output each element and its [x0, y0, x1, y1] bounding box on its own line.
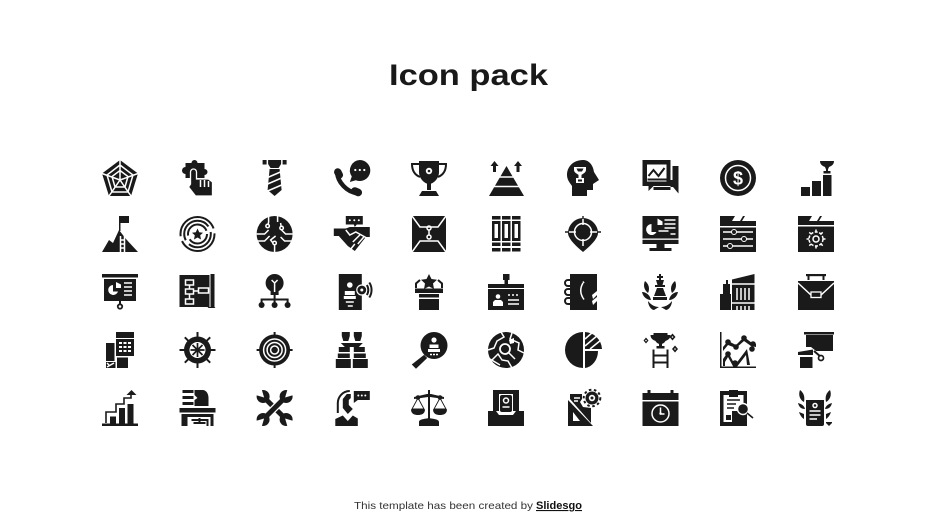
icon: target location pin	[565, 216, 601, 252]
icon: bars with trophy	[801, 161, 834, 196]
icon: office desk with chair	[180, 390, 216, 426]
icon: document with laurels	[798, 390, 832, 426]
icon: computer monitor dashboard	[642, 216, 678, 251]
icon: smartphone with signal	[339, 274, 372, 310]
icon: mountain with flag	[102, 216, 138, 252]
icon: necktie	[263, 160, 287, 196]
icon: briefcase	[798, 274, 834, 310]
icon: clipboard with magnifier	[720, 390, 753, 426]
icon: phone call with speech bubble	[337, 160, 370, 193]
icon: balance scales	[411, 390, 447, 426]
footer credit: Slidesgo	[536, 500, 582, 512]
icon: lightbulb hierarchy	[259, 274, 291, 308]
icon: podium with star	[415, 274, 443, 310]
icon: ID badge	[488, 274, 524, 310]
icon: folder with sliders	[720, 216, 756, 252]
icon: circular maze	[180, 217, 214, 251]
icon: puzzle and hand	[182, 160, 212, 196]
icon: calculator with shapes	[106, 332, 134, 368]
icon: envelope with string	[412, 216, 446, 252]
icon: line chart with dots	[720, 332, 756, 368]
icon: head with trophy	[567, 160, 599, 196]
icon: target rings	[257, 332, 293, 368]
icon: notebook with phone	[565, 274, 597, 310]
icon: folder with gear	[798, 216, 834, 252]
icon: map with magnifier	[488, 332, 524, 368]
icon: crossed wrenches	[256, 389, 294, 427]
icon: dollar coin	[720, 160, 756, 196]
icon: dollar coin: $	[733, 168, 743, 188]
icon: set square with gear	[568, 390, 600, 426]
icon: pyramid with arrows	[488, 161, 524, 196]
icon: trophy cup	[412, 161, 446, 196]
icon: presenter at board	[798, 332, 834, 368]
icon: calendar with clock	[642, 390, 678, 426]
icon: radar pentagon	[102, 160, 138, 196]
icon: circuit globe	[257, 216, 293, 252]
icon: chart speech bubbles	[642, 160, 678, 194]
icon: city buildings	[720, 274, 754, 310]
icon: stair chart with arrow	[102, 390, 138, 426]
footer credit: This template has been created by	[354, 500, 534, 512]
title: Icon pack	[389, 59, 548, 92]
icon: profile in inbox tray	[488, 390, 524, 426]
icon: chess king with laurels	[642, 274, 678, 310]
icon: binoculars	[336, 332, 368, 368]
icon: handshake with speech bubble	[334, 216, 370, 251]
icon: pie chart	[565, 332, 602, 368]
icon: trophy on ladder with sparkles	[644, 333, 678, 368]
icon: blueprint flowchart	[180, 274, 216, 308]
icon: support agent with speech bubble	[335, 391, 370, 426]
icon: row of books	[492, 216, 520, 252]
icon: ship wheel	[180, 332, 216, 368]
icon: presentation board	[102, 274, 138, 309]
icon: magnifier over person	[412, 332, 448, 368]
